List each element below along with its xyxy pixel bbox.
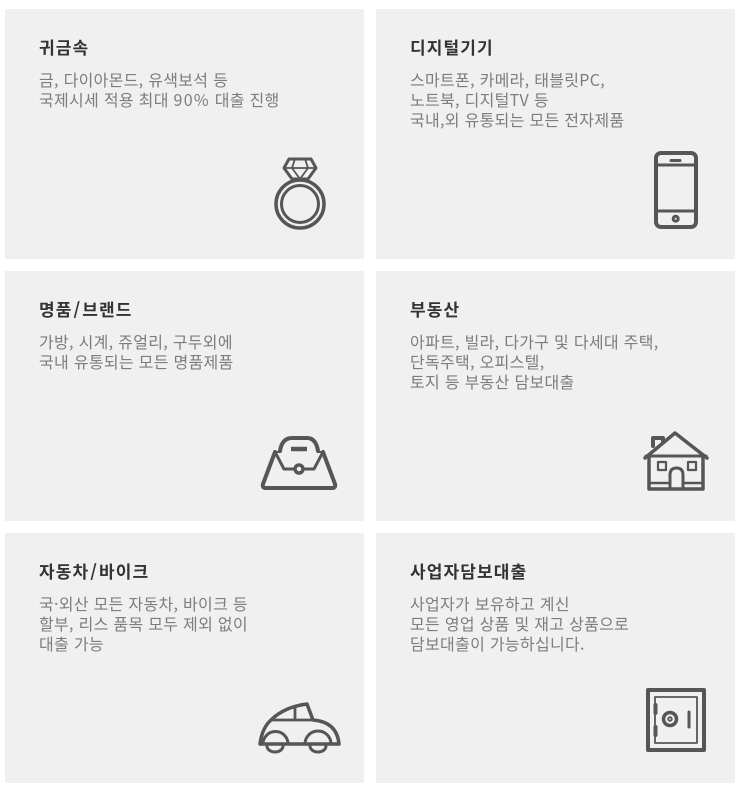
- icon: ring: [274, 158, 326, 230]
- heading: precious metals: 귀금속: [39, 34, 89, 58]
- text: precious metals description: 국제시세 적용 최대 90% 대출 진행: [39, 87, 280, 111]
- text: real estate description: 단독주택, 오피스텔,: [410, 349, 544, 373]
- text: business collateral loan description: [410, 591, 629, 655]
- text: digital devices description: 노트북, 디지털TV 등: [410, 87, 549, 111]
- text: luxury brands description: 국내 유통되는 모든 명품제품: [39, 349, 234, 373]
- icon: house: [643, 431, 709, 491]
- text: real estate description: [410, 329, 658, 393]
- icon: handbag: [260, 436, 338, 490]
- text: precious metals description: 금, 다이아몬드, 유색보석 등: [39, 67, 228, 91]
- panel: precious metals: [5, 9, 364, 259]
- heading: cars and motorcycles: 자동차/바이크: [39, 558, 149, 582]
- icon: safe: [646, 688, 706, 752]
- heading: business collateral loan: 사업자담보대출: [410, 558, 527, 582]
- icon: smartphone: [654, 151, 698, 229]
- text: business collateral loan description: 사업자가 보유하고 계신: [410, 591, 570, 615]
- panel: business collateral loan: [376, 533, 735, 783]
- panel: digital devices: [376, 9, 735, 259]
- text: luxury brands description: 가방, 시계, 쥬얼리, 구두외에: [39, 329, 233, 353]
- text: cars and motorcycles description: [39, 591, 248, 655]
- text: precious metals description: [39, 67, 280, 111]
- panel: luxury brands: [5, 271, 364, 521]
- text: business collateral loan description: 담보대출이 가능하십니다.: [410, 631, 585, 655]
- text: real estate description: 아파트, 빌라, 다가구 및 다세대 주택,: [410, 329, 658, 353]
- heading: real estate: 부동산: [410, 296, 460, 320]
- icon: car: [258, 702, 341, 754]
- panel: real estate: [376, 271, 735, 521]
- text: cars and motorcycles description: 국·외산 모든 자동차, 바이크 등: [39, 591, 248, 615]
- text: digital devices description: 스마트폰, 카메라, 태블릿PC,: [410, 67, 605, 91]
- text: luxury brands description: [39, 329, 234, 373]
- text: business collateral loan description: 모든 영업 상품 및 재고 상품으로: [410, 611, 629, 635]
- text: cars and motorcycles description: 할부, 리스 품목 모두 제외 없이: [39, 611, 248, 635]
- heading: luxury brands: 명품/브랜드: [39, 296, 132, 320]
- text: cars and motorcycles description: 대출 가능: [39, 631, 104, 655]
- heading: digital devices: 디지털기기: [410, 34, 494, 58]
- text: digital devices description: 국내,외 유통되는 모든 전자제품: [410, 107, 624, 131]
- panel: cars and motorcycles: [5, 533, 364, 783]
- text: digital devices description: [410, 67, 624, 131]
- text: real estate description: 토지 등 부동산 담보대출: [410, 369, 575, 393]
